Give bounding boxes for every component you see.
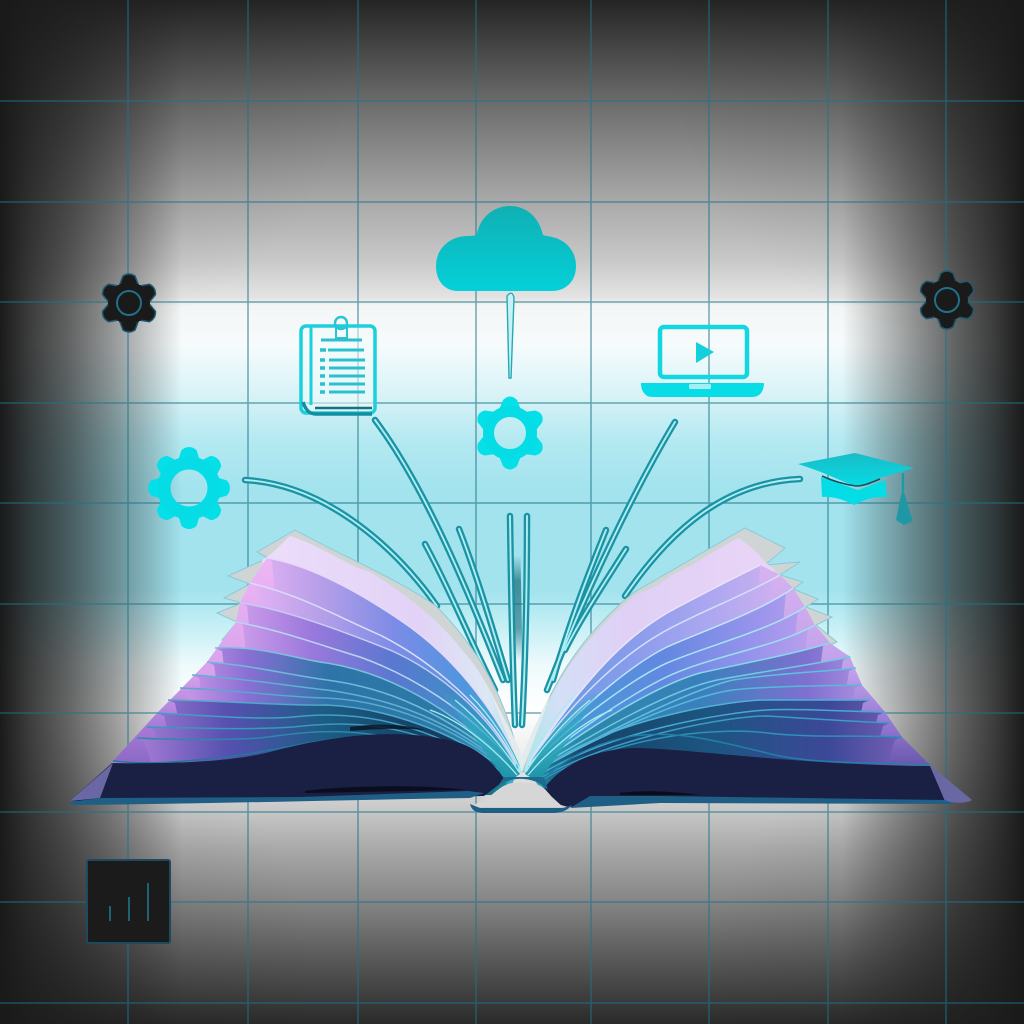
open book <box>70 528 972 813</box>
icon: dark gear right <box>917 271 977 329</box>
icon: cloud <box>436 206 576 291</box>
icon: dark bar chart panel <box>87 860 170 943</box>
icon: graduation cap <box>798 453 914 525</box>
spine and exposed paper <box>470 783 563 807</box>
teal fan at gutter <box>430 690 612 782</box>
left pages <box>113 530 522 795</box>
left cover <box>70 734 505 802</box>
icon: gear centre <box>473 396 547 470</box>
icon: checklist notebook <box>301 317 375 414</box>
arrow: cloud stem <box>507 293 514 378</box>
left page edges <box>113 558 520 778</box>
stems rising from book <box>245 420 800 725</box>
right page edges <box>528 565 930 780</box>
right pages <box>523 528 945 800</box>
icon: dark gear left <box>99 274 159 332</box>
icon: gear left <box>148 447 230 529</box>
right cover <box>545 748 945 807</box>
icon: laptop with play button <box>641 327 764 397</box>
